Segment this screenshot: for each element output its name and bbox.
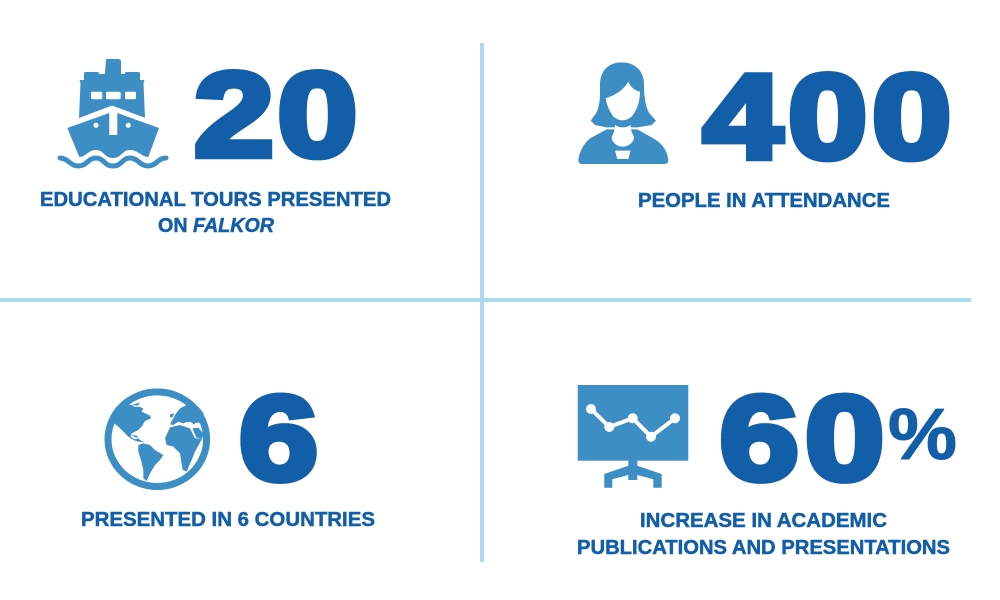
number: 60 percent: % <box>888 395 957 475</box>
panel: countries <box>81 371 375 531</box>
icon: ship <box>60 59 166 166</box>
icon: presentation chart <box>578 385 688 488</box>
number: 20: 20 <box>194 48 357 182</box>
number: 60 percent <box>720 371 957 505</box>
number: 6: 6 <box>239 371 318 505</box>
label: academic publications: PUBLICATIONS AND PRESENTATIONS <box>577 536 950 559</box>
label: academic publications: INCREASE IN ACADEMIC <box>640 509 887 532</box>
label: people in attendance: PEOPLE IN ATTENDANCE <box>638 189 890 212</box>
panel: people in attendance <box>578 50 951 212</box>
number: 60 percent: 60 <box>720 371 884 505</box>
panel: academic publications <box>577 371 957 559</box>
label: educational tours: ON FALKOR <box>158 214 274 237</box>
label: countries: PRESENTED IN 6 COUNTRIES <box>81 508 375 531</box>
panel: educational tours <box>40 48 391 237</box>
number: 400: 400 <box>703 50 951 183</box>
label: educational tours <box>40 188 391 237</box>
label: academic publications <box>577 509 950 559</box>
label: educational tours: EDUCATIONAL TOURS PRESENTED <box>40 188 391 211</box>
icon: person <box>578 62 668 164</box>
icon: globe <box>108 392 207 487</box>
